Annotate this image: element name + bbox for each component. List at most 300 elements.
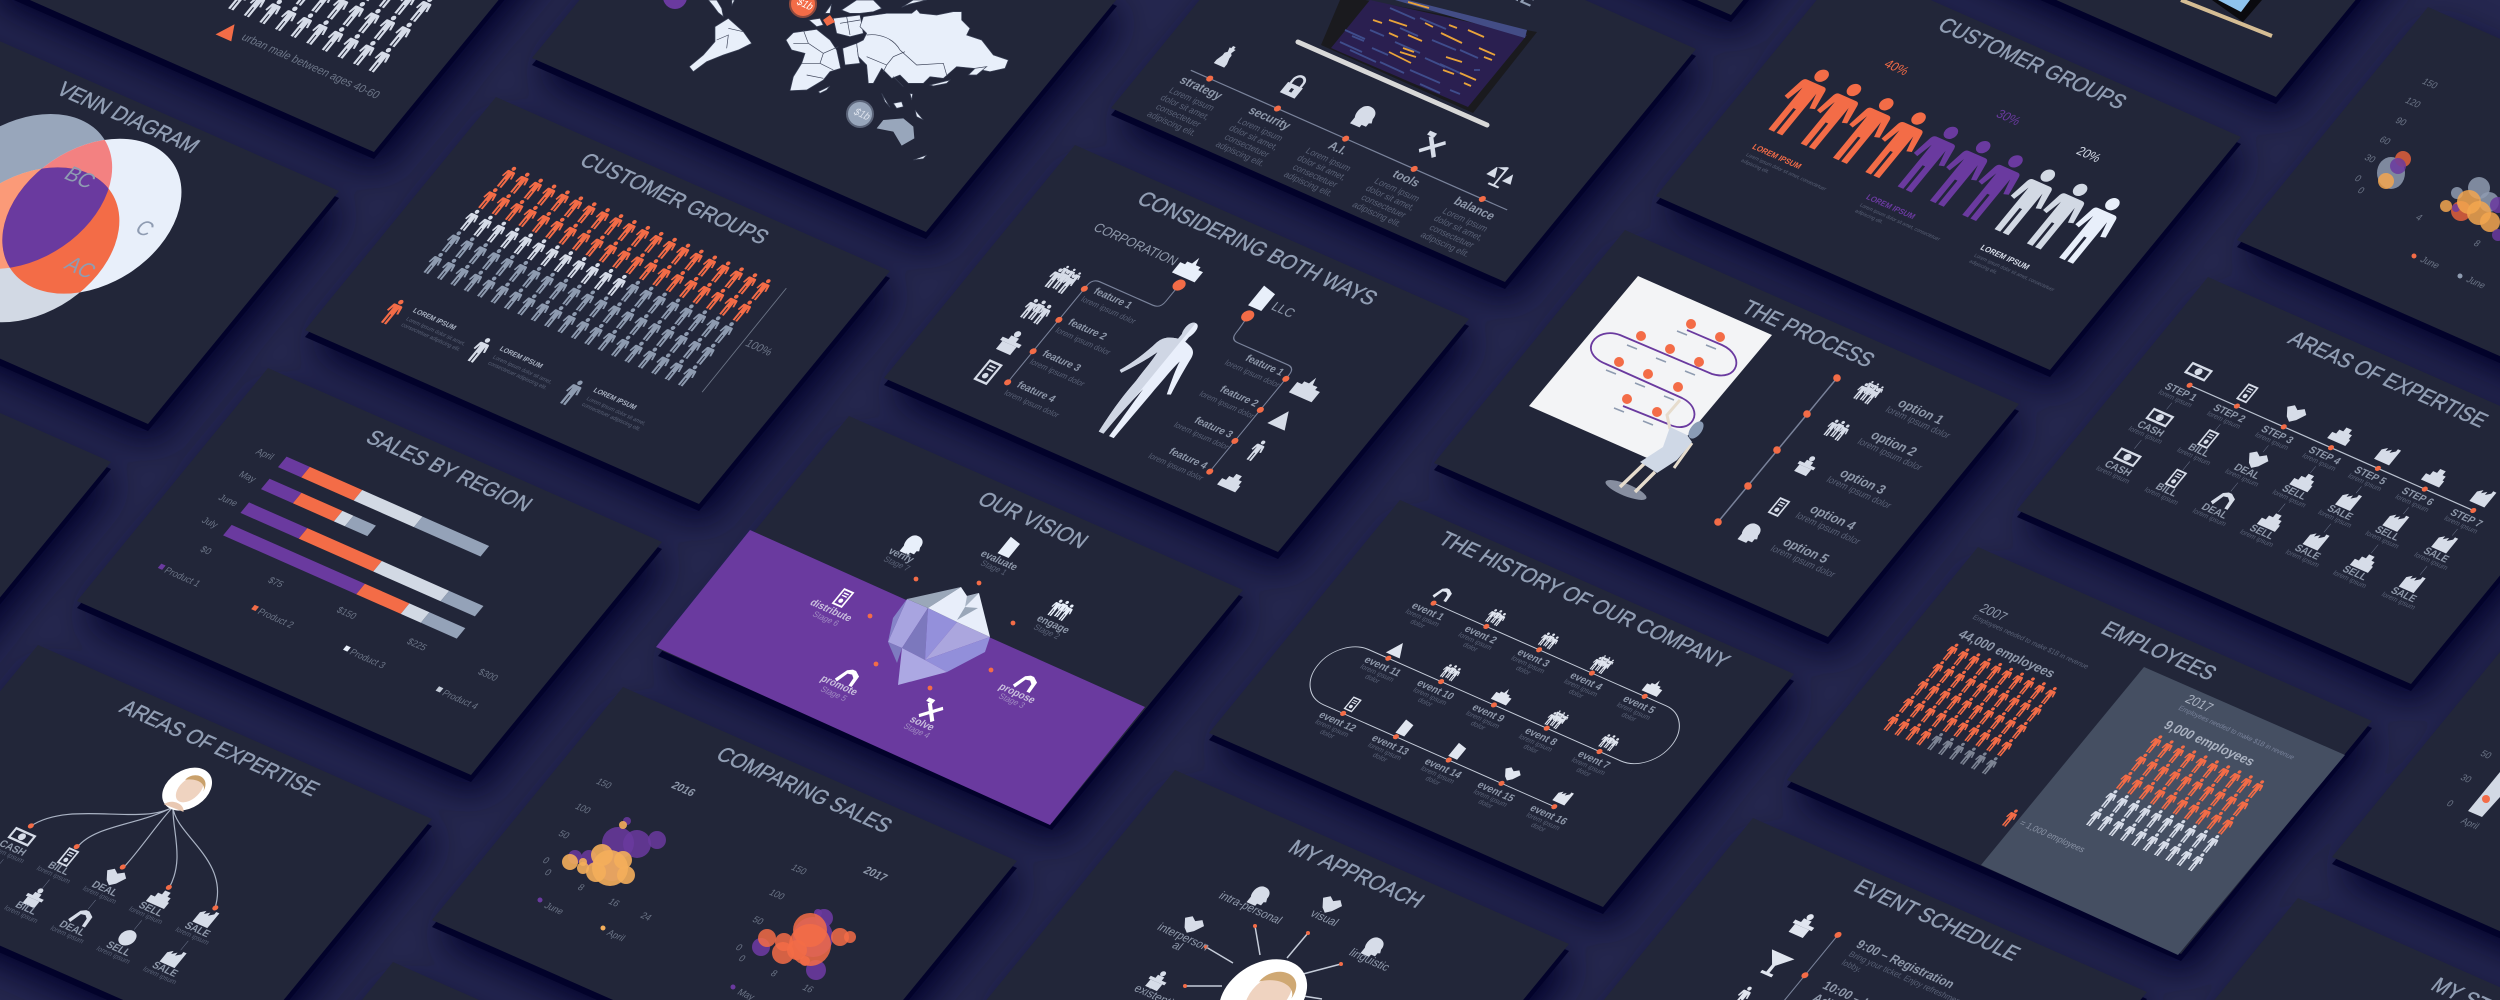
- chart 2016 legend: June: [542, 901, 566, 916]
- stage: engage: [1031, 597, 1078, 641]
- option 1: option 1: [1895, 396, 1948, 427]
- event 11: event 11: [1361, 655, 1403, 679]
- chart 2016 axis: 100: [573, 801, 593, 816]
- stage: propose: propose: [996, 682, 1038, 706]
- axis labels: 0: [2352, 173, 2364, 184]
- stage: verify: [881, 533, 928, 573]
- row labels: July: [200, 515, 221, 530]
- column 6: SELL: [2340, 564, 2369, 583]
- event 3: [1504, 626, 1570, 681]
- 2017 text block: [2161, 692, 2307, 781]
- axis labels: 4: [2413, 212, 2425, 223]
- legend: Product 2: [256, 607, 296, 630]
- column 4: SELL: [2247, 523, 2276, 542]
- right features: feature 2: [1217, 384, 1261, 410]
- 2007 text block: 2007: [1976, 601, 2011, 624]
- panel: software: [1111, 0, 1696, 282]
- column 5: [2284, 440, 2410, 569]
- event 7: [1565, 728, 1630, 783]
- stacked bars: [222, 457, 521, 639]
- column 7: lorem ipsum: [2412, 552, 2449, 572]
- axis labels: 90: [2393, 115, 2409, 128]
- event 7: lorem ipsum: [1570, 757, 1607, 777]
- tree column 5: SALE: [149, 960, 180, 980]
- 2007 people grid: [1881, 642, 2060, 776]
- item 9:00: 9:00 – Registration: [1853, 938, 1958, 991]
- step: tools: consectetuer: [1359, 192, 1409, 220]
- axis labels: $300: [476, 667, 500, 683]
- chart 2016 axis: 24: [638, 910, 654, 923]
- timeline track: [1295, 582, 1694, 828]
- bubble: grey: [847, 101, 873, 127]
- panel: considering both ways: [884, 145, 1469, 552]
- tree column 5: SALE: [182, 921, 212, 940]
- venn labels: C: [130, 216, 159, 241]
- human figure: [1098, 322, 1198, 438]
- event 13: dolor: [1371, 752, 1389, 764]
- panel: customer groups percentages: [1656, 0, 2241, 370]
- panel: employees: [1787, 547, 2372, 955]
- left features: lorem ipsum dolor: [1028, 357, 1087, 388]
- 2017 text block: 9,000 employees: [2161, 718, 2258, 769]
- column 1: lorem ipsum: [2127, 426, 2164, 446]
- right features: lorem ipsum dolor: [1223, 358, 1282, 389]
- column 3: [2191, 400, 2316, 528]
- axis labels: 120: [2403, 95, 2423, 110]
- chart 2017 bubbles: [752, 909, 856, 980]
- column 2: lorem ipsum: [2175, 447, 2212, 467]
- row labels: [198, 447, 278, 530]
- event 2: event 2: [1462, 624, 1499, 646]
- rays: [1185, 926, 1341, 999]
- chart 2017 axis: 100: [767, 887, 787, 902]
- panel: my approach: [984, 770, 1569, 1000]
- chart 2016 axis: 8: [575, 882, 587, 893]
- column 5: lorem ipsum: [2284, 549, 2321, 569]
- legend 2: adipiscing elit.: [1853, 208, 1884, 225]
- event 16: dolor: [1529, 822, 1547, 834]
- legend: consectetuer adipiscing elit.: [399, 322, 462, 353]
- tree column 4: SELL: [103, 940, 133, 959]
- venn labels: AC: [60, 252, 101, 283]
- event 3: lorem ipsum: [1509, 655, 1546, 675]
- icon: llc building: [1248, 286, 1277, 311]
- chart 2016 axis: 50: [556, 828, 572, 841]
- title: COMPARING SALES: [711, 743, 897, 837]
- legend 2: [1853, 193, 1950, 248]
- tree column 5: lorem ipsum: [141, 966, 178, 986]
- legend: Lorem ipsum dolor sit amet,: [404, 317, 467, 347]
- column 5: SALE: [2324, 504, 2355, 523]
- axis labels: [198, 544, 500, 684]
- step: tools: tools: [1389, 167, 1424, 190]
- portrait: [1201, 947, 1325, 1000]
- panel: my story: [2107, 898, 2500, 1000]
- event 15: event 15: [1474, 780, 1517, 804]
- bubble: grey: $1b: [851, 107, 873, 123]
- stage: promote: [818, 666, 862, 703]
- panel: event schedule: [1562, 818, 2147, 1000]
- step: strategy: [1145, 36, 1258, 138]
- tree column 3: lorem ipsum: [48, 925, 85, 945]
- event 11: lorem ipsum: [1358, 664, 1395, 684]
- step: balance: adipiscing elit.: [1418, 230, 1472, 259]
- axis labels: 60: [2377, 134, 2393, 147]
- event 12: [1307, 690, 1375, 745]
- option 5: option 5: [1780, 535, 1833, 566]
- title: OUR VISION: [973, 488, 1093, 553]
- tree column 4: lorem ipsum: [94, 946, 131, 966]
- tree column 5: [141, 898, 233, 986]
- left features: feature 1: [1091, 286, 1135, 312]
- event 10: lorem ipsum: [1411, 687, 1448, 707]
- event 9: event 9: [1469, 702, 1507, 725]
- chart 2016 axis: 2016: [668, 780, 698, 799]
- legend 1: [1739, 142, 1836, 198]
- map continents: [689, 0, 1008, 160]
- event 13: lorem ipsum: [1366, 742, 1403, 762]
- percentage labels: 20%: [2073, 144, 2104, 165]
- bubbles: [2377, 151, 2500, 241]
- column 5: SALE: [2292, 543, 2323, 562]
- stage: solve: [901, 697, 947, 740]
- scale line: [701, 288, 787, 392]
- event 11: dolor: [1363, 674, 1381, 686]
- stage: solve: Stage 4: [901, 721, 933, 740]
- title: AREAS OF EXPERTISE: [115, 696, 324, 801]
- chart 2016 axis: 0: [542, 867, 554, 878]
- axis labels: 8: [2471, 238, 2483, 249]
- event 15: [1465, 761, 1532, 815]
- panel: areas of expertise (steps): [2017, 277, 2500, 684]
- step: strategy: consectetuer: [1154, 102, 1203, 129]
- step: tools: dolor sit amet,: [1364, 183, 1417, 212]
- right features: lorem ipsum dolor: [1146, 452, 1206, 483]
- column 6: SELL: [2372, 525, 2402, 544]
- laptop corner: [2181, 0, 2272, 36]
- event 14: lorem ipsum: [1419, 765, 1456, 786]
- event 16: event 16: [1527, 803, 1570, 828]
- icon: capitol building: [1172, 253, 1211, 282]
- column 7: STEP 7: [2447, 508, 2485, 530]
- event 8: dolor: [1521, 744, 1540, 755]
- item: intra-personal: intra-personal: [1216, 889, 1285, 927]
- legend: [155, 562, 480, 711]
- option 2: lorem ipsum dolor: [1855, 437, 1925, 472]
- step: A.I.: [1282, 97, 1395, 198]
- lighter right half: [1981, 667, 2345, 955]
- column 2: lorem ipsum: [2143, 487, 2180, 507]
- column 2: BILL: [2153, 482, 2179, 499]
- venn circles: [0, 114, 182, 322]
- event 14: [1413, 737, 1480, 792]
- event 10: dolor: [1416, 697, 1434, 709]
- column 7: lorem ipsum: [2442, 515, 2479, 535]
- process captions: [1606, 331, 1716, 425]
- chart 2017 axis: 50: [750, 914, 766, 927]
- llc label: LLC: [1268, 299, 1299, 320]
- chart 2016 axis: 150: [594, 776, 614, 791]
- legend: consectetuer adipiscing elit.: [486, 361, 549, 391]
- chart 2016 axis: 16: [606, 896, 622, 909]
- event 1: lorem ipsum: [1404, 609, 1441, 629]
- left features: feature 4: [1014, 380, 1058, 405]
- 2007 text block: Employees needed to make $1B in revenue: [1971, 614, 2090, 671]
- option 3: [1773, 446, 1894, 510]
- step line: [2190, 385, 2473, 510]
- tree column 5: lorem ipsum: [173, 927, 210, 947]
- 2007 text block: [1955, 601, 2101, 690]
- title: SALES BY REGION: [361, 426, 537, 516]
- title: AREAS OF EXPERTISE: [2283, 327, 2492, 432]
- left features: feature 3: [1039, 349, 1083, 374]
- title: EVENT SCHEDULE: [1849, 875, 2025, 965]
- event 15: dolor: [1476, 799, 1495, 811]
- people grid: [225, 0, 437, 74]
- step: balance: consectetuer: [1427, 223, 1477, 250]
- stage: promote: Stage 5: [818, 684, 850, 703]
- column 4: lorem ipsum: [2238, 529, 2275, 549]
- chart 2017 axis: 150: [789, 862, 809, 877]
- event 14: event 14: [1422, 757, 1464, 781]
- legend: June: [2418, 255, 2442, 270]
- orange markers: [868, 577, 1015, 690]
- option 5: lorem ipsum dolor: [1768, 544, 1838, 579]
- item: visual: [1307, 894, 1345, 929]
- event 7: event 7: [1575, 749, 1612, 772]
- event 3: event 3: [1514, 647, 1552, 670]
- axis labels: April: [2459, 816, 2481, 831]
- legend: LOREM IPSUM: [498, 346, 544, 370]
- item 10:00: [1750, 949, 1949, 1000]
- event 8: [1512, 704, 1578, 760]
- option 2: option 2: [1868, 428, 1921, 459]
- title: THE PROCESS: [1737, 297, 1879, 372]
- tree column 2: BILL: [12, 900, 39, 917]
- column 6: [2331, 462, 2456, 590]
- panel: history of our company: [1209, 500, 1794, 907]
- event 2: dolor: [1461, 642, 1479, 654]
- panel: customer groups grid: [305, 97, 890, 504]
- column 6: STEP 6: [2399, 486, 2436, 508]
- panel: comparing sales: [432, 687, 1017, 1000]
- title: VENN DIAGRAM: [52, 78, 204, 158]
- portrait: [152, 761, 222, 817]
- chart 2017 axis: 2017: [860, 865, 890, 884]
- bar: [2468, 772, 2500, 817]
- people grid: [421, 164, 775, 389]
- scale note: = 1,000 employees: [2017, 818, 2088, 855]
- axis labels: $225: [405, 637, 429, 653]
- option 3: option 3: [1837, 466, 1890, 497]
- event 5: event 5: [1620, 694, 1658, 716]
- column 3: lorem ipsum: [2223, 468, 2260, 488]
- legend: LOREM IPSUM: [591, 387, 638, 412]
- tree column 1: [0, 816, 49, 876]
- legend text: urban male between ages 40-60: [239, 32, 382, 101]
- column 4: STEP 4: [2306, 445, 2343, 467]
- item 9:00: [1779, 910, 2036, 1000]
- item: interpersonal: interperson: [1154, 921, 1212, 953]
- legend 1: Lorem ipsum dolor sit amet, consectetuer: [1744, 152, 1828, 192]
- legend: Product 3: [347, 647, 388, 670]
- stage: propose: [996, 672, 1040, 710]
- column 2: lorem ipsum: [2205, 411, 2242, 431]
- step: A.I.: consectetuer: [1290, 162, 1340, 189]
- step: balance: Lorem ipsum: [1440, 206, 1490, 233]
- option 4: [1744, 482, 1863, 546]
- woman figure: [1603, 400, 1706, 504]
- event 1: dolor: [1408, 619, 1427, 630]
- percentage labels: [1880, 57, 2105, 165]
- axis labels: 30: [2458, 772, 2474, 785]
- event 4: lorem ipsum: [1562, 678, 1599, 699]
- event 4: dolor: [1567, 689, 1585, 700]
- event 16: lorem ipsum: [1524, 812, 1561, 832]
- chart 2017 axis: [733, 862, 890, 995]
- event 13: [1360, 713, 1427, 769]
- column 4: lorem ipsum: [2300, 453, 2337, 473]
- column 3: lorem ipsum: [2253, 432, 2290, 452]
- venn labels: BC: [59, 162, 101, 193]
- row labels: May: [237, 469, 259, 484]
- panel: world map: [532, 0, 1117, 232]
- item: interpersonal: al: [1169, 939, 1186, 953]
- event 12: event 12: [1316, 710, 1358, 734]
- panel: urban male people chart: [0, 0, 565, 152]
- title: CUSTOMER GROUPS: [1933, 14, 2131, 114]
- tree column 2: BILL: [45, 860, 72, 878]
- right features: lorem ipsum dolor: [1172, 421, 1231, 452]
- chart 2017 axis: 8: [768, 968, 780, 979]
- legend: consectetuer adipiscing elit.: [580, 402, 642, 433]
- event 15: lorem ipsum: [1472, 789, 1509, 809]
- bubble: red: [790, 0, 816, 17]
- right connector: [1144, 316, 1314, 472]
- stage: verify: verify: [885, 546, 916, 566]
- panel: our vision: [656, 416, 1243, 825]
- item: linguistic: linguistic: [1346, 946, 1393, 974]
- axis labels: 0: [2355, 185, 2367, 196]
- axis labels: 150: [2420, 76, 2440, 91]
- column 5: lorem ipsum: [2316, 509, 2353, 529]
- tree column 2: lorem ipsum: [2, 905, 39, 925]
- step: strategy: dolor sit amet,: [1158, 93, 1212, 122]
- title: CUSTOMER GROUPS: [575, 149, 773, 249]
- option 3: lorem ipsum dolor: [1824, 475, 1894, 510]
- purple sea band: [656, 530, 1145, 825]
- panel: areas of expertise (tree): [0, 645, 432, 1000]
- column 5: STEP 5: [2351, 465, 2389, 488]
- chart 2017 axis: 0: [736, 953, 748, 964]
- column 3: lorem ipsum: [2191, 508, 2228, 528]
- left connector: [1008, 255, 1179, 412]
- 2017 text block: Employees needed to make $1B in revenue: [2176, 705, 2296, 761]
- timeline line: [1752, 935, 1838, 1000]
- tree column 2: lorem ipsum: [35, 865, 72, 885]
- event 1: [1399, 581, 1463, 634]
- event 14: dolor: [1423, 775, 1442, 787]
- tree column 3: DEAL: [56, 919, 87, 939]
- panel: bubble chart right: [2237, 7, 2500, 414]
- tree column 2: [2, 837, 95, 925]
- process dots: [1614, 319, 1725, 417]
- title: CONSIDERING BOTH WAYS: [1132, 188, 1382, 310]
- row labels: April: [254, 447, 276, 462]
- 2017 text block: 2017: [2182, 692, 2217, 715]
- serpentine path: [1591, 330, 1736, 427]
- corporation label: CORPORATION: [1090, 220, 1182, 268]
- right features: feature 3: [1191, 415, 1235, 441]
- legend 3: LOREM IPSUM: [1978, 243, 2032, 272]
- axis labels: 50: [2478, 748, 2494, 761]
- column 1: STEP 1: [2162, 381, 2199, 404]
- column 6: lorem ipsum: [2363, 530, 2400, 550]
- axis labels: $150: [335, 605, 359, 621]
- panel: the process: [1434, 230, 2019, 637]
- laptop: [1298, 0, 1537, 125]
- axis labels: 30: [2362, 152, 2378, 165]
- event 2: [1452, 603, 1517, 658]
- step: A.I.: A.I.: [1325, 139, 1351, 157]
- row labels: June: [216, 492, 240, 508]
- stage: solve: solve: [907, 714, 937, 733]
- event 12: dolor: [1318, 729, 1336, 741]
- step: balance: balance: [1451, 194, 1499, 223]
- legend: Product 1: [162, 565, 203, 589]
- column 1: lorem ipsum: [2094, 465, 2131, 485]
- step: strategy: Lorem ipsum: [1167, 85, 1217, 113]
- axis labels: [2444, 748, 2494, 831]
- column 1: [2094, 359, 2218, 485]
- step: security: security: [1245, 104, 1294, 133]
- item: visual: visual: [1307, 907, 1341, 929]
- title: EMPLOYEES: [2096, 618, 2221, 685]
- event 10: [1405, 657, 1473, 713]
- column 4: lorem ipsum: [2270, 489, 2307, 509]
- stage: verify: Stage 7: [881, 554, 913, 573]
- column 3: DEAL: [2199, 502, 2230, 521]
- chart 2016 legend: April: [605, 928, 627, 943]
- legend: June: [2464, 275, 2488, 290]
- item: existential: [1131, 968, 1184, 1000]
- column 3: STEP 3: [2258, 424, 2296, 446]
- tree column 4: lorem ipsum: [127, 906, 164, 926]
- highlighted country: [823, 15, 835, 26]
- scale label: 100%: [742, 338, 775, 358]
- scale note: [2000, 808, 2091, 859]
- left features: lorem ipsum dolor: [1053, 326, 1113, 357]
- step: A.I.: Lorem ipsum: [1304, 146, 1354, 173]
- stage: propose: Stage 3: [996, 691, 1028, 710]
- option 2: [1803, 410, 1925, 472]
- chart 2017 axis: 16: [800, 982, 816, 995]
- axis labels: $75: [266, 575, 286, 589]
- 2017 people grid: [2084, 734, 2267, 872]
- column 7: [2380, 483, 2500, 612]
- event 2: lorem ipsum: [1456, 632, 1493, 652]
- legend: [377, 298, 656, 436]
- title: MY APPROACH: [1284, 836, 1429, 913]
- step: strategy: strategy: [1176, 73, 1226, 102]
- event 9: lorem ipsum: [1464, 710, 1501, 730]
- venn labels: [5, 162, 173, 291]
- event 9: dolor: [1469, 720, 1487, 732]
- stage: engage: engage: [1034, 614, 1072, 636]
- timeline line: [1191, 70, 1507, 210]
- stage: distribute: Stage 6: [810, 609, 842, 628]
- panel: april bar chart: [2332, 624, 2500, 1000]
